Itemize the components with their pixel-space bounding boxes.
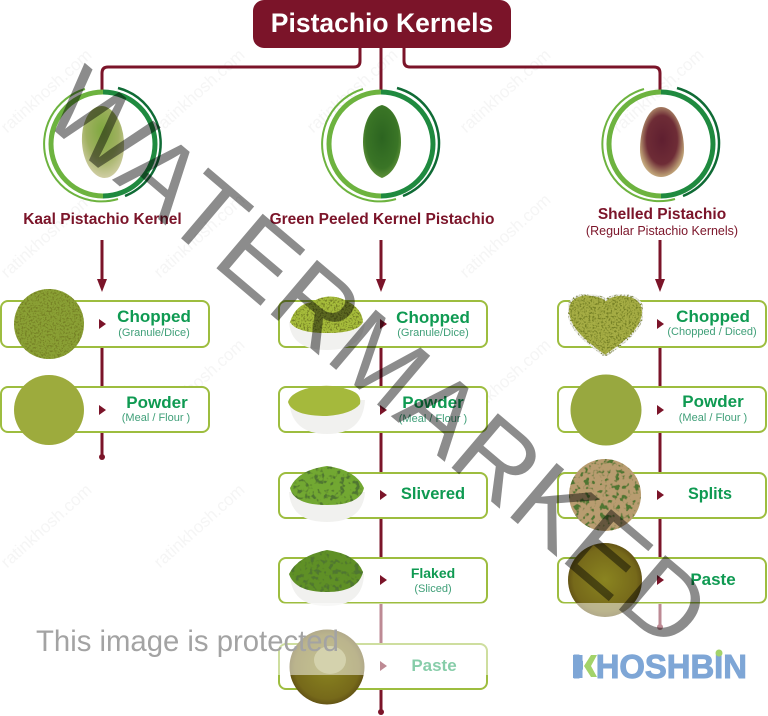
faint site watermark pattern: ratinkhosh.com	[0, 190, 96, 282]
panel: column 2 paste	[279, 630, 487, 704]
icon: bowl of splits	[569, 459, 641, 531]
sublabel: Meal / Flour: (Meal / Flour )	[399, 413, 467, 425]
sublabel: Granule/Dice: (Granule/Dice)	[118, 327, 190, 339]
icon: bowl of flakes	[289, 550, 364, 606]
panel: column 1 powder	[1, 375, 209, 445]
label: Flaked: Flaked	[411, 565, 455, 581]
icon: shelled kernel ring	[602, 88, 719, 201]
subheading: Regular Pistachio Kernels: (Regular Pistachio Kernels)	[586, 224, 738, 238]
logo: Khoshbin: KHOSHBIN	[572, 648, 747, 685]
sublabel: Chopped / Diced: (Chopped / Diced)	[667, 326, 757, 338]
notice: This image is protected: This image is protected	[36, 625, 339, 658]
panel: column 2 chopped	[279, 296, 487, 350]
label: Powder: Powder	[126, 393, 188, 412]
heading: Green Peeled Kernel Pistachio: Green Peeled Kernel Pistachio	[270, 211, 494, 228]
icon: bowl of chopped	[289, 296, 365, 350]
title: Pistachio Kernels	[271, 8, 493, 38]
arrow: column 3 flow	[655, 240, 665, 630]
faint site watermark pattern: ratinkhosh.com	[303, 45, 402, 137]
label: Chopped: Chopped	[117, 307, 191, 326]
label: Powder: Powder	[402, 393, 464, 412]
icon: kaal kernel ring	[44, 88, 161, 201]
panel: column 2 flaked	[279, 550, 487, 606]
faint site watermark pattern: ratinkhosh.com	[456, 335, 555, 427]
panel: column 3 splits	[558, 459, 766, 531]
label: Paste: Paste	[690, 570, 736, 589]
connector lines from title to categories	[102, 48, 660, 92]
label: Powder: Powder	[682, 392, 744, 411]
panel: column 1 chopped	[1, 289, 209, 359]
panel: Shelled pistachio	[586, 88, 738, 238]
heading: Shelled Pistachio: Shelled Pistachio	[598, 206, 726, 223]
faint site watermark pattern: ratinkhosh.com	[0, 480, 96, 572]
faint site watermark pattern: ratinkhosh.com	[609, 45, 708, 137]
icon: chopped pile	[14, 289, 84, 359]
label: Paste: Paste	[411, 656, 457, 675]
icon: bowl of paste	[568, 543, 642, 617]
icon: powder pile	[14, 375, 84, 445]
faint site watermark pattern: ratinkhosh.com	[150, 190, 249, 282]
icon: green kernel ring	[322, 88, 439, 201]
sublabel: Sliced: (Sliced)	[414, 583, 452, 595]
arrow: column 1 flow	[97, 240, 107, 460]
icon: bowl of paste	[290, 630, 364, 704]
sublabel: Meal / Flour: (Meal / Flour )	[122, 412, 190, 424]
panel: column 2 powder	[279, 386, 487, 434]
label: Splits: Splits	[688, 485, 732, 503]
sublabel: Granule/Dice: (Granule/Dice)	[397, 327, 469, 339]
faint site watermark pattern: ratinkhosh.com	[150, 480, 249, 572]
faint site watermark pattern: ratinkhosh.com	[456, 45, 555, 137]
panel: column 3 chopped	[558, 295, 766, 356]
panel: Kaal pistachio kernel	[23, 88, 182, 228]
faint site watermark pattern: ratinkhosh.com	[0, 45, 96, 137]
panel: column 3 paste	[558, 543, 766, 617]
faint site watermark pattern: ratinkhosh.com	[150, 45, 249, 137]
faint site watermark pattern: ratinkhosh.com	[456, 190, 555, 282]
icon: powder pile	[570, 374, 642, 446]
icon: bowl of slivers	[289, 466, 365, 522]
title	[253, 0, 511, 48]
protection overlay band	[0, 603, 768, 675]
sublabel: Meal / Flour: (Meal / Flour )	[679, 412, 747, 424]
panel: Green peeled kernel	[270, 88, 494, 228]
panel: column 2 slivered	[279, 466, 487, 522]
label: Chopped: Chopped	[396, 308, 470, 327]
icon: bowl of powder	[288, 386, 365, 434]
arrow: column 2 flow	[376, 240, 386, 715]
faint site watermark pattern: ratinkhosh.com	[150, 335, 249, 427]
watermark: WATERMARKED: WATERMARKED	[23, 46, 731, 671]
label: Chopped: Chopped	[676, 307, 750, 326]
icon: heart dish of chopped	[568, 295, 643, 356]
heading: Kaal Pistachio Kernel: Kaal Pistachio Kernel	[23, 211, 182, 228]
panel: column 3 powder	[558, 374, 766, 446]
label: Slivered: Slivered	[401, 485, 465, 503]
faint site watermark pattern	[0, 45, 708, 572]
